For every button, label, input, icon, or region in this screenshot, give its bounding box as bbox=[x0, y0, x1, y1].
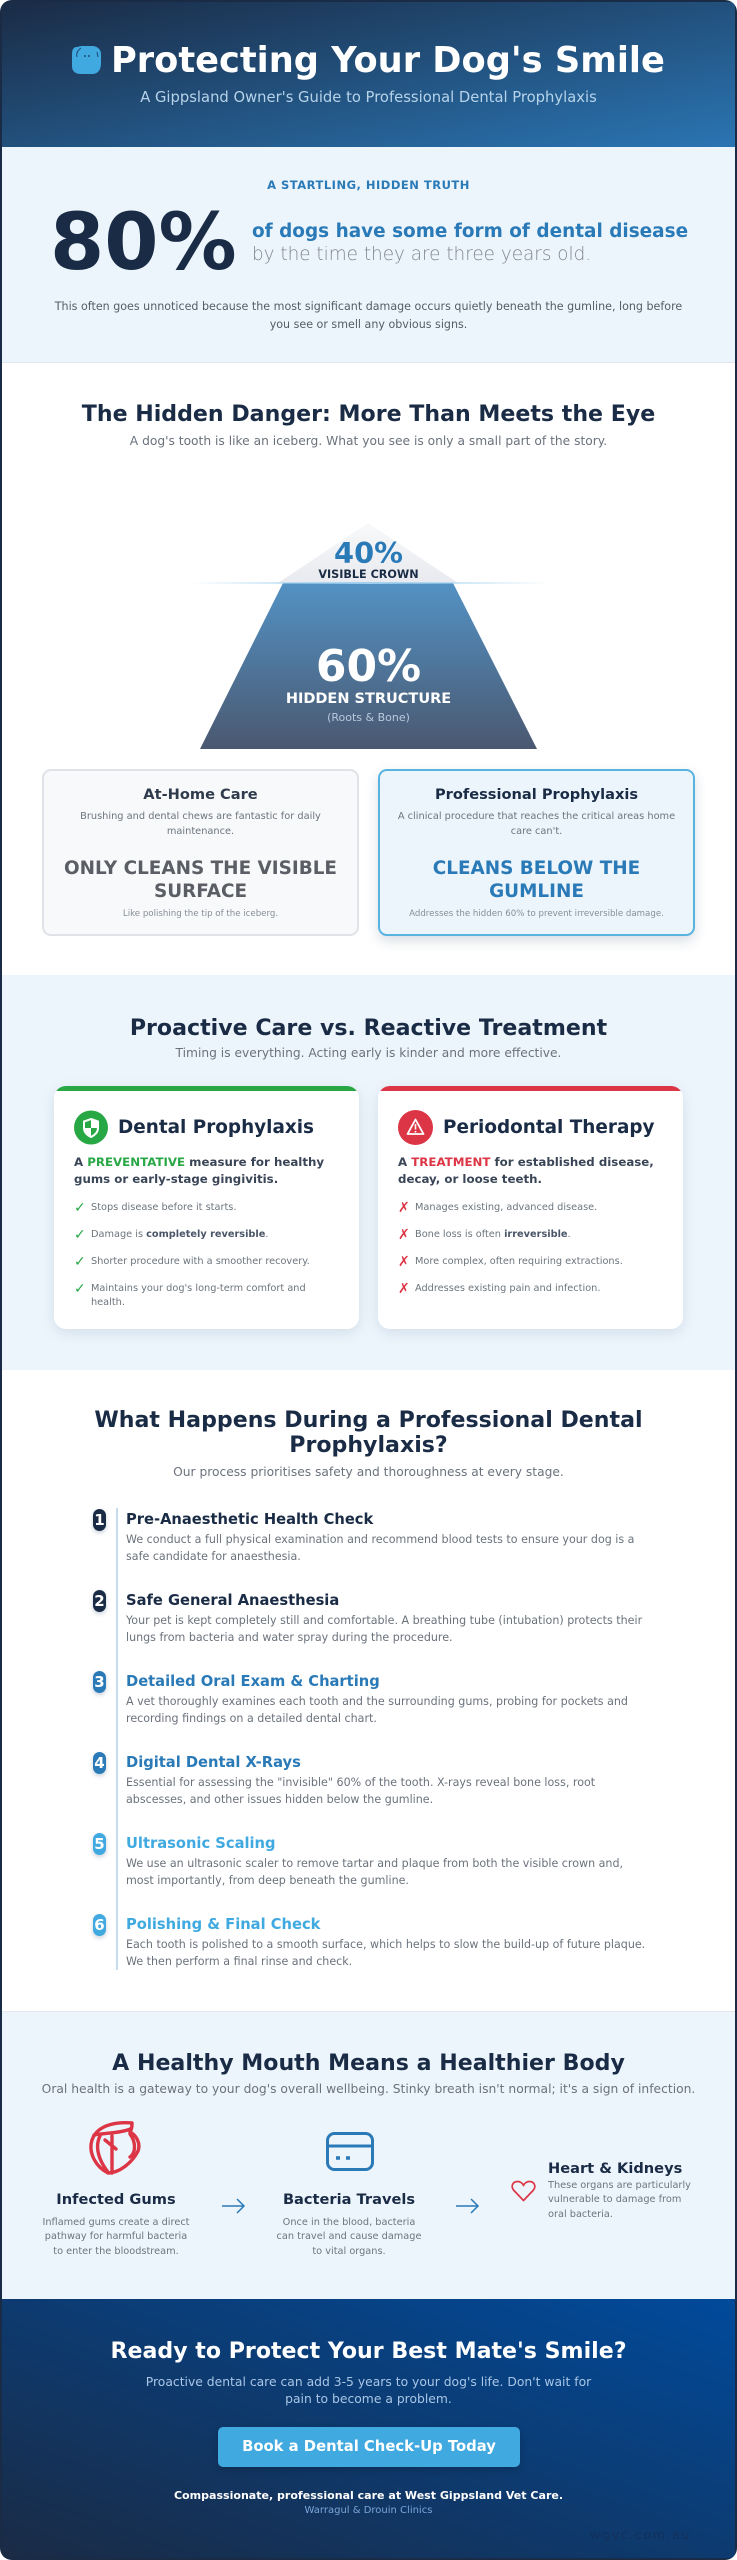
list item: Maintains your dog's long-term comfort and bbox=[91, 1282, 306, 1294]
panel: hidden danger bbox=[2, 363, 735, 975]
badge bbox=[93, 1752, 106, 1774]
badge bbox=[93, 1671, 106, 1693]
card claim: CLEANS BELOW THE bbox=[433, 858, 640, 879]
badge: 3 bbox=[94, 1673, 105, 1691]
check list bbox=[74, 1200, 310, 1308]
label: Heart & Kidneys bbox=[548, 2160, 682, 2177]
list item: Shorter procedure with a smoother recovery. bbox=[91, 1256, 310, 1267]
badge bbox=[93, 1914, 106, 1936]
panel: procedure timeline bbox=[2, 1370, 735, 2012]
step text: Your pet is kept completely still and comfortable. A breathing tube (intubation) protects their bbox=[126, 1614, 642, 1626]
step text bbox=[126, 1614, 642, 1644]
cross mark: ✗ bbox=[398, 1254, 410, 1270]
card title: Dental Prophylaxis bbox=[118, 1117, 314, 1138]
card claim: GUMLINE bbox=[489, 880, 584, 902]
check mark: ✓ bbox=[74, 1227, 86, 1243]
card description: Brushing and dental chews are fantastic for daily bbox=[80, 811, 321, 822]
description: to enter the bloodstream. bbox=[53, 2246, 179, 2257]
step text bbox=[126, 1938, 645, 1968]
subtitle: A Gippsland Owner's Guide to Professional Dental Prophylaxis bbox=[140, 89, 597, 106]
step text: We use an ultrasonic scaler to remove tartar and plaque from both the visible crown and, bbox=[126, 1856, 623, 1870]
badge bbox=[93, 1590, 106, 1612]
list item: Stops disease before it starts. bbox=[91, 1202, 236, 1213]
description bbox=[42, 2216, 190, 2257]
card claim bbox=[433, 858, 640, 902]
description: to vital organs. bbox=[312, 2246, 386, 2257]
card: at-home care bbox=[42, 769, 359, 936]
step text bbox=[126, 1856, 623, 1886]
step text bbox=[126, 1776, 595, 1806]
panel: startling statistic bbox=[2, 147, 735, 363]
stat eyebrow: A STARTLING, HIDDEN TRUTH bbox=[267, 178, 470, 192]
description bbox=[277, 2216, 421, 2257]
hidden label: HIDDEN STRUCTURE bbox=[286, 691, 451, 707]
step text bbox=[126, 1532, 634, 1562]
card description: maintenance. bbox=[167, 826, 234, 837]
cross list bbox=[398, 1200, 623, 1297]
description: Once in the blood, bacteria bbox=[283, 2216, 415, 2228]
card description: care can't. bbox=[511, 826, 562, 837]
hidden structure block bbox=[200, 583, 537, 749]
title: Protecting Your Dog's Smile bbox=[111, 40, 665, 81]
iceberg tooth diagram bbox=[200, 527, 537, 749]
step title: Safe General Anaesthesia bbox=[126, 1592, 339, 1608]
description: Inflamed gums create a direct bbox=[42, 2216, 190, 2228]
stat explanation: you see or smell any obvious signs. bbox=[270, 318, 467, 331]
step 4 bbox=[91, 1752, 595, 1806]
card claim: SURFACE bbox=[154, 880, 247, 902]
body text: Proactive dental care can add 3-5 years to your dog's life. Don't wait for bbox=[146, 2375, 591, 2389]
button: Book a Dental Check-Up Today bbox=[242, 2438, 496, 2455]
panel: call to action bbox=[2, 2299, 735, 2558]
card: professional prophylaxis bbox=[378, 769, 695, 936]
check mark: ✓ bbox=[74, 1281, 86, 1297]
list item: Damage is completely reversible. bbox=[91, 1229, 268, 1240]
description: These organs are particularly bbox=[548, 2180, 691, 2190]
badge: 6 bbox=[94, 1916, 105, 1934]
stat number: 80% bbox=[50, 198, 237, 288]
website watermark: wgvc.com.au bbox=[590, 2528, 691, 2543]
arrow bbox=[456, 2198, 479, 2214]
step 1 bbox=[91, 1509, 634, 1562]
timeline line bbox=[116, 1508, 118, 1970]
badge: 2 bbox=[94, 1592, 105, 1610]
badge bbox=[93, 1509, 106, 1531]
stat explanation bbox=[54, 300, 682, 331]
panel: healthy mouth healthier body bbox=[2, 2012, 735, 2299]
step 5 bbox=[91, 1833, 623, 1886]
card lead bbox=[398, 1155, 654, 1186]
card: periodontal therapy bbox=[378, 1086, 683, 1329]
hidden note: (Roots & Bone) bbox=[327, 711, 410, 724]
badge: 1 bbox=[94, 1511, 105, 1529]
step text: lungs from bacteria and water spray during the procedure. bbox=[126, 1630, 453, 1644]
visible crown block bbox=[278, 523, 458, 583]
card lead: gums or early-stage gingivitis. bbox=[74, 1172, 278, 1186]
label: Bacteria Travels bbox=[283, 2191, 415, 2208]
cross mark: ✗ bbox=[398, 1281, 410, 1297]
clinic line: Compassionate, professional care at West Gippsland Vet Care. bbox=[174, 2489, 563, 2502]
arrow bbox=[222, 2198, 245, 2214]
subheading: Oral health is a gateway to your dog's overall wellbeing. Stinky breath isn't normal; it's a sign of infection. bbox=[42, 2082, 695, 2096]
stat explanation: This often goes unnoticed because the most significant damage occurs quietly beneath the gumline, long before bbox=[55, 300, 682, 313]
check mark: ✓ bbox=[74, 1254, 86, 1270]
list item: More complex, often requiring extractions. bbox=[415, 1256, 623, 1267]
icon: infected gums bbox=[89, 2121, 141, 2175]
step title: Ultrasonic Scaling bbox=[126, 1834, 276, 1852]
green top bar bbox=[54, 1086, 359, 1091]
subheading: Timing is everything. Acting early is kinder and more effective. bbox=[176, 1046, 561, 1060]
card lead: A TREATMENT for established disease, bbox=[398, 1155, 654, 1169]
heading: The Hidden Danger: More Than Meets the Eye bbox=[82, 401, 655, 427]
step text: A vet thoroughly examines each tooth and the surrounding gums, probing for pockets and bbox=[126, 1694, 628, 1708]
card claim: ONLY CLEANS THE VISIBLE bbox=[64, 858, 337, 879]
label: Infected Gums bbox=[56, 2191, 176, 2208]
description: vulnerable to damage from bbox=[548, 2194, 681, 2205]
stat headline: of dogs have some form of dental disease bbox=[252, 221, 688, 242]
button bbox=[218, 2427, 520, 2467]
description: oral bacteria. bbox=[548, 2209, 613, 2220]
crown percent: 40% bbox=[334, 536, 403, 570]
stat subline: by the time they are three years old. bbox=[252, 244, 591, 265]
card lead bbox=[74, 1155, 324, 1186]
subheading: Our process prioritises safety and thoroughness at every stage. bbox=[173, 1465, 564, 1479]
crown label: VISIBLE CROWN bbox=[318, 568, 419, 581]
card claim bbox=[64, 858, 337, 902]
step 2 bbox=[91, 1590, 642, 1644]
description bbox=[548, 2180, 691, 2220]
step text bbox=[126, 1694, 628, 1724]
card lead: A PREVENTATIVE measure for healthy bbox=[74, 1155, 324, 1169]
step text: safe candidate for anaesthesia. bbox=[126, 1550, 301, 1562]
panel: proactive vs reactive bbox=[2, 975, 735, 1370]
step text: abscesses, and other issues hidden below the gumline. bbox=[126, 1792, 433, 1806]
card: dental prophylaxis bbox=[54, 1086, 359, 1329]
icon: warning bbox=[398, 1110, 433, 1145]
heading: Prophylaxis? bbox=[289, 1432, 448, 1458]
heading: Proactive Care vs. Reactive Treatment bbox=[130, 1015, 607, 1041]
list item: Manages existing, advanced disease. bbox=[415, 1202, 597, 1213]
step text: Each tooth is polished to a smooth surface, which helps to slow the build-up of future plaque. bbox=[126, 1938, 645, 1950]
description: pathway for harmful bacteria bbox=[45, 2231, 187, 2242]
heading: Ready to Protect Your Best Mate's Smile? bbox=[110, 2338, 627, 2364]
heading: What Happens During a Professional Dental bbox=[94, 1407, 643, 1433]
heading bbox=[94, 1407, 643, 1458]
red top bar bbox=[378, 1086, 683, 1091]
card description: A clinical procedure that reaches the critical areas home bbox=[398, 811, 675, 822]
card description bbox=[398, 811, 675, 837]
clinic locations: Warragul & Drouin Clinics bbox=[305, 2505, 432, 2516]
list item bbox=[91, 1282, 306, 1308]
badge: 5 bbox=[94, 1835, 105, 1853]
step text: most importantly, from deep beneath the gumline. bbox=[126, 1874, 409, 1886]
step text: recording findings on a detailed dental chart. bbox=[126, 1712, 377, 1724]
gumline strip bbox=[190, 582, 550, 584]
gumline label: THE GUMLINE bbox=[324, 574, 413, 587]
icon: shield bbox=[74, 1110, 108, 1144]
step title: Detailed Oral Exam & Charting bbox=[126, 1672, 380, 1690]
icon: heart bbox=[511, 2180, 536, 2202]
check mark: ✓ bbox=[74, 1200, 86, 1216]
card description bbox=[80, 811, 321, 837]
card note: Like polishing the tip of the iceberg. bbox=[123, 909, 278, 919]
heading: A Healthy Mouth Means a Healthier Body bbox=[112, 2050, 625, 2076]
body text bbox=[146, 2375, 592, 2406]
card title: Periodontal Therapy bbox=[443, 1117, 655, 1138]
badge bbox=[93, 1833, 106, 1855]
subheading: A dog's tooth is like an iceberg. What you see is only a small part of the story. bbox=[130, 434, 607, 448]
cross mark: ✗ bbox=[398, 1227, 410, 1243]
step 6 bbox=[91, 1914, 645, 1968]
step text: We conduct a full physical examination and recommend blood tests to ensure your dog is a bbox=[126, 1532, 634, 1546]
step 3 bbox=[91, 1671, 628, 1724]
hidden percent: 60% bbox=[316, 641, 421, 692]
panel: header bbox=[2, 2, 735, 147]
card title: Professional Prophylaxis bbox=[435, 786, 638, 803]
body text: pain to become a problem. bbox=[285, 2392, 452, 2406]
icon: bacteria travels card bbox=[326, 2132, 374, 2171]
badge: 4 bbox=[94, 1754, 105, 1772]
card title: At-Home Care bbox=[143, 786, 258, 803]
icon: dog head logo bbox=[72, 46, 101, 74]
step title: Pre-Anaesthetic Health Check bbox=[126, 1510, 373, 1528]
list item: Bone loss is often irreversible. bbox=[415, 1229, 571, 1240]
card lead: decay, or loose teeth. bbox=[398, 1172, 542, 1186]
step title: Polishing & Final Check bbox=[126, 1916, 320, 1932]
step title: Digital Dental X-Rays bbox=[126, 1754, 301, 1770]
list item: Addresses existing pain and infection. bbox=[415, 1283, 600, 1294]
step text: Essential for assessing the "invisible" 60% of the tooth. X-rays reveal bone loss, root bbox=[126, 1776, 595, 1788]
list item: health. bbox=[91, 1297, 125, 1308]
step text: We then perform a final rinse and check. bbox=[126, 1954, 352, 1968]
card note: Addresses the hidden 60% to prevent irreversible damage. bbox=[409, 909, 664, 919]
description: can travel and cause damage bbox=[277, 2231, 421, 2242]
cross mark: ✗ bbox=[398, 1200, 410, 1216]
